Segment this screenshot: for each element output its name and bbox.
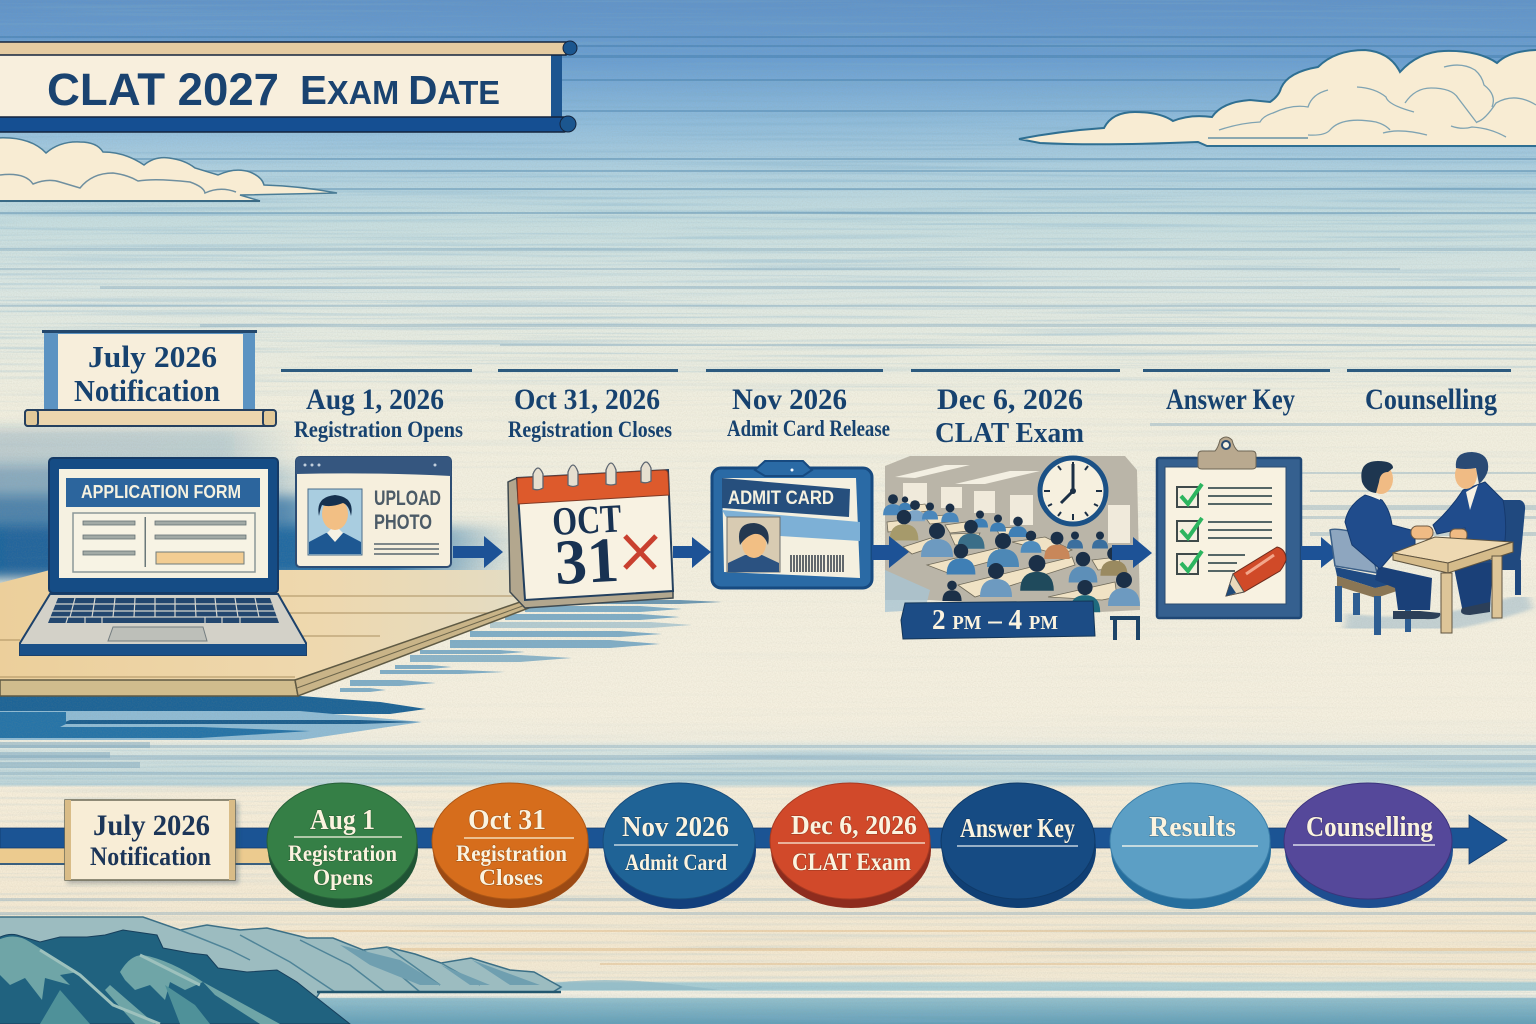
badge title: Counselling bbox=[1306, 812, 1433, 843]
banner right strip bbox=[551, 55, 562, 118]
cloud: upper left bbox=[0, 138, 337, 201]
badge: Dec 6, 2026 bbox=[770, 783, 931, 908]
far chair bbox=[1478, 500, 1525, 595]
exam label bbox=[935, 383, 1084, 449]
counselling label: Counselling bbox=[1365, 383, 1497, 416]
photo of person bbox=[308, 489, 362, 555]
form header bar: APPLICATION FORM bbox=[81, 482, 241, 502]
person on left bbox=[1345, 461, 1440, 619]
table bbox=[1393, 537, 1513, 633]
pale back hills bbox=[0, 917, 561, 1024]
badge caption: CLAT Exam bbox=[792, 849, 911, 876]
badge: Results bbox=[1110, 783, 1271, 909]
text: upload: UPLOAD bbox=[374, 487, 441, 510]
bottom timeline: bar with arrow bbox=[0, 815, 1507, 865]
arrow: upload to calendar bbox=[453, 536, 503, 568]
date: Oct 31, 2026: Oct 31, 2026 bbox=[514, 383, 660, 416]
counsellor on right bbox=[1433, 452, 1506, 615]
blue water strokes around the desk bbox=[0, 600, 722, 768]
icon: calendar Oct 31 bbox=[508, 462, 673, 608]
date: Nov 2026: Nov 2026 bbox=[732, 383, 847, 416]
arrow: exam hall to answer key bbox=[1112, 537, 1152, 568]
badge title: Results bbox=[1149, 812, 1236, 843]
arrow: calendar to admit card bbox=[673, 537, 711, 568]
near chair bbox=[1330, 529, 1415, 635]
icon: upload photo window bbox=[296, 457, 451, 567]
icon: admit card bbox=[712, 461, 872, 588]
arrow: admit card to exam hall bbox=[872, 536, 909, 568]
badge caption second line: Opens bbox=[313, 865, 373, 890]
answer key label: Answer Key bbox=[1166, 383, 1295, 416]
title text: exam date: EXAM DATE bbox=[300, 67, 500, 113]
badge: Answer Key bbox=[941, 783, 1096, 908]
illustration: exam hall bbox=[883, 456, 1140, 640]
title text: CLAT 2027 bbox=[47, 64, 279, 115]
top timeline divider lines bbox=[281, 369, 1511, 372]
illustration: coastal hills bbox=[0, 917, 720, 1024]
banner top rod bbox=[0, 41, 577, 55]
caption: Registration Opens: Registration Opens bbox=[294, 417, 463, 442]
banner bottom rod bbox=[0, 116, 576, 132]
text: admit card: ADMIT CARD bbox=[728, 488, 834, 509]
badge caption: Admit Card bbox=[625, 850, 727, 875]
cloud: upper right bbox=[1019, 50, 1536, 146]
caption: Registration Closes: Registration Closes bbox=[508, 417, 672, 442]
form header bar bbox=[66, 478, 260, 507]
badge caption: Registration bbox=[288, 841, 397, 866]
icon: red cross bbox=[625, 536, 656, 568]
date: Aug 1, 2026: Aug 1, 2026 bbox=[306, 383, 444, 416]
clipboard clip bbox=[1198, 437, 1256, 469]
banner paper bbox=[0, 54, 552, 118]
icon: laptop with application form bbox=[20, 458, 306, 655]
badge title: Answer Key bbox=[960, 813, 1075, 843]
lighter tree patches bbox=[0, 936, 280, 1024]
sign: July 2026 notification bbox=[25, 330, 276, 426]
badge: Oct 31 bbox=[432, 783, 589, 908]
arrow: answer key to counselling bbox=[1301, 537, 1340, 568]
form fields bbox=[73, 513, 255, 572]
distant headland bbox=[540, 980, 720, 990]
icon: clock bbox=[1040, 458, 1106, 524]
registration opens label bbox=[294, 383, 463, 442]
time banner bbox=[901, 601, 1095, 639]
sign text: Notification: Notification bbox=[74, 373, 220, 408]
registration closes label bbox=[508, 383, 672, 442]
text: OCT: OCT bbox=[551, 495, 623, 544]
laptop screen bbox=[49, 458, 278, 593]
caption: Admit Card Release: Admit Card Release bbox=[727, 416, 890, 441]
badge caption: Registration bbox=[456, 841, 567, 866]
students bbox=[883, 494, 1140, 612]
checklist bbox=[1177, 484, 1272, 574]
wooden desk bbox=[0, 570, 534, 696]
badge date: Oct 31 bbox=[468, 805, 546, 836]
title banner bbox=[0, 41, 577, 132]
dark front forest hills bbox=[0, 930, 350, 1024]
text: July 2026: July 2026 bbox=[93, 809, 210, 842]
desks bbox=[887, 504, 1122, 600]
sign: bottom July 2026 notification bbox=[65, 800, 235, 880]
badge date: Dec 6, 2026 bbox=[791, 810, 917, 840]
pencil bbox=[1226, 547, 1286, 596]
barcode bbox=[791, 555, 843, 572]
badge date: Nov 2026 bbox=[622, 812, 729, 843]
admit card label bbox=[727, 383, 890, 441]
badge caption second line: Closes bbox=[479, 865, 543, 890]
badge: Aug 1 bbox=[267, 783, 418, 908]
caption: CLAT Exam: CLAT Exam bbox=[935, 417, 1084, 449]
sign text: July 2026: July 2026 bbox=[88, 339, 217, 374]
time banner: 2 PM – 4 PM bbox=[932, 604, 1058, 636]
card photo bbox=[727, 517, 780, 572]
badge: Nov 2026 bbox=[603, 783, 756, 909]
text: photo: PHOTO bbox=[374, 511, 432, 534]
illustration: counselling meeting bbox=[1330, 452, 1530, 635]
text: Notification: Notification bbox=[90, 842, 211, 871]
date: Dec 6, 2026: Dec 6, 2026 bbox=[937, 383, 1083, 416]
badge: Counselling bbox=[1284, 783, 1453, 908]
text: 31: 31 bbox=[553, 524, 621, 598]
icon: clipboard answer key bbox=[1157, 437, 1301, 618]
laptop base bbox=[20, 594, 306, 655]
badge date: Aug 1 bbox=[310, 805, 375, 836]
